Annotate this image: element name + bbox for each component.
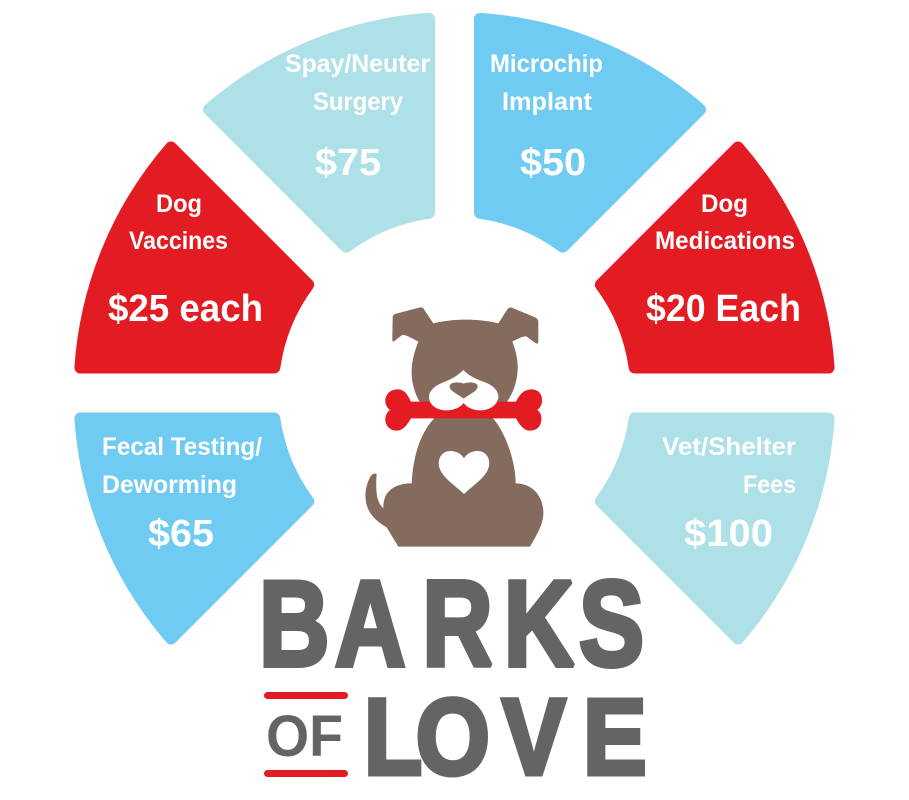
- panel: fecal testing and deworming: [80, 418, 308, 638]
- panel: dog vaccines: $25 each: [108, 288, 263, 330]
- panel: vet/shelter fees: [601, 418, 829, 638]
- panel: spay/neuter surgery: Spay/Neuter: [285, 50, 430, 78]
- dog head and ears: [392, 307, 538, 405]
- dog body and tail: [365, 417, 543, 547]
- bone: [385, 389, 542, 431]
- nose: [450, 382, 478, 399]
- panel: vet/shelter fees: Fees: [743, 471, 796, 499]
- panel: dog vaccines: Vaccines: [129, 227, 228, 255]
- logo wordmark: BARKS: BARKS: [259, 556, 644, 692]
- panel: microchip implant: [480, 19, 700, 247]
- panel: fecal testing and deworming: $65: [148, 513, 214, 555]
- icon: dog holding bone: [365, 307, 543, 547]
- panel: dog vaccines: Dog: [156, 190, 202, 218]
- panel: vet/shelter fees: $100: [684, 513, 773, 555]
- panel: fecal testing and deworming: Fecal Testing/: [102, 433, 262, 461]
- panel: dog vaccines: [80, 148, 308, 368]
- panel: dog medications: Medications: [655, 227, 795, 255]
- panel: spay/neuter surgery: Surgery: [313, 88, 403, 116]
- panel: spay/neuter surgery: [209, 19, 430, 247]
- logo wordmark: LOVE: LOVE: [364, 676, 647, 797]
- panel: spay/neuter surgery: $75: [315, 142, 381, 184]
- chest heart: [439, 451, 489, 494]
- panel: dog medications: Dog: [701, 190, 748, 218]
- panel: microchip implant: Microchip: [490, 50, 603, 78]
- panel: microchip implant: Implant: [502, 88, 593, 116]
- panel: microchip implant: $50: [520, 142, 586, 184]
- panel: dog medications: $20 Each: [646, 288, 801, 330]
- panel: vet/shelter fees: Vet/Shelter: [662, 433, 796, 461]
- muzzle: [429, 370, 498, 410]
- logo: OF with red bars: OF: [266, 704, 343, 769]
- panel: fecal testing and deworming: Deworming: [102, 471, 237, 499]
- panel: dog medications: [601, 148, 829, 368]
